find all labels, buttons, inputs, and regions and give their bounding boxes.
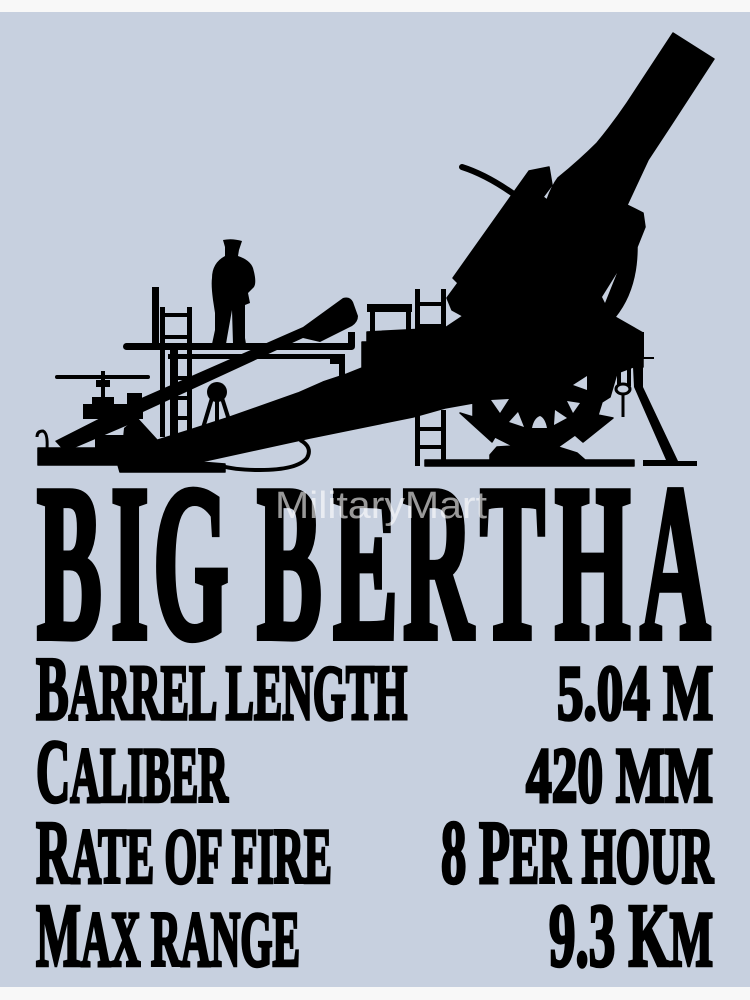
spec row: caliber: [36, 721, 713, 821]
platform rails: [123, 332, 355, 380]
howitzer barrel and carriage: [38, 33, 714, 472]
spec row: max range: [36, 885, 713, 985]
upper ladder: [415, 289, 446, 334]
right support strut: [633, 367, 697, 466]
title: Big Bertha: BIG BERTHA: [37, 440, 710, 685]
spec row: caliber: CALIBER: [36, 721, 228, 821]
spec row: caliber: 420 MM: [526, 732, 713, 819]
table on carriage: [367, 304, 412, 334]
sector wheel openings: [491, 273, 617, 428]
spec row: max range: MAX RANGE: [36, 885, 300, 985]
watermark: MilitaryMart: [275, 485, 487, 527]
pendulum sight: [616, 332, 654, 417]
spec row: barrel length: BARREL LENGTH: [36, 638, 407, 739]
cable under trail: [222, 440, 309, 470]
illustration: Big Bertha howitzer silhouette: [37, 33, 714, 472]
left wheel mechanism: [55, 371, 158, 450]
spec row: barrel length: 5.04 M: [557, 650, 713, 736]
spec row: rate of fire: [36, 802, 714, 902]
spec row: max range: 9.3 KM: [549, 885, 713, 985]
hose on breech: [462, 167, 515, 195]
hook at trail end: [37, 431, 47, 449]
spec row: rate of fire: 8 PER HOUR: [441, 802, 714, 902]
left ladder and post: [152, 287, 192, 437]
lower ladder: [415, 410, 446, 466]
spec row: barrel length: [36, 638, 713, 739]
soldier figure: [212, 239, 255, 344]
small tripod: [203, 382, 229, 428]
spec row: rate of fire: RATE OF FIRE: [36, 802, 332, 902]
rammer rod with paddle: [55, 298, 358, 452]
